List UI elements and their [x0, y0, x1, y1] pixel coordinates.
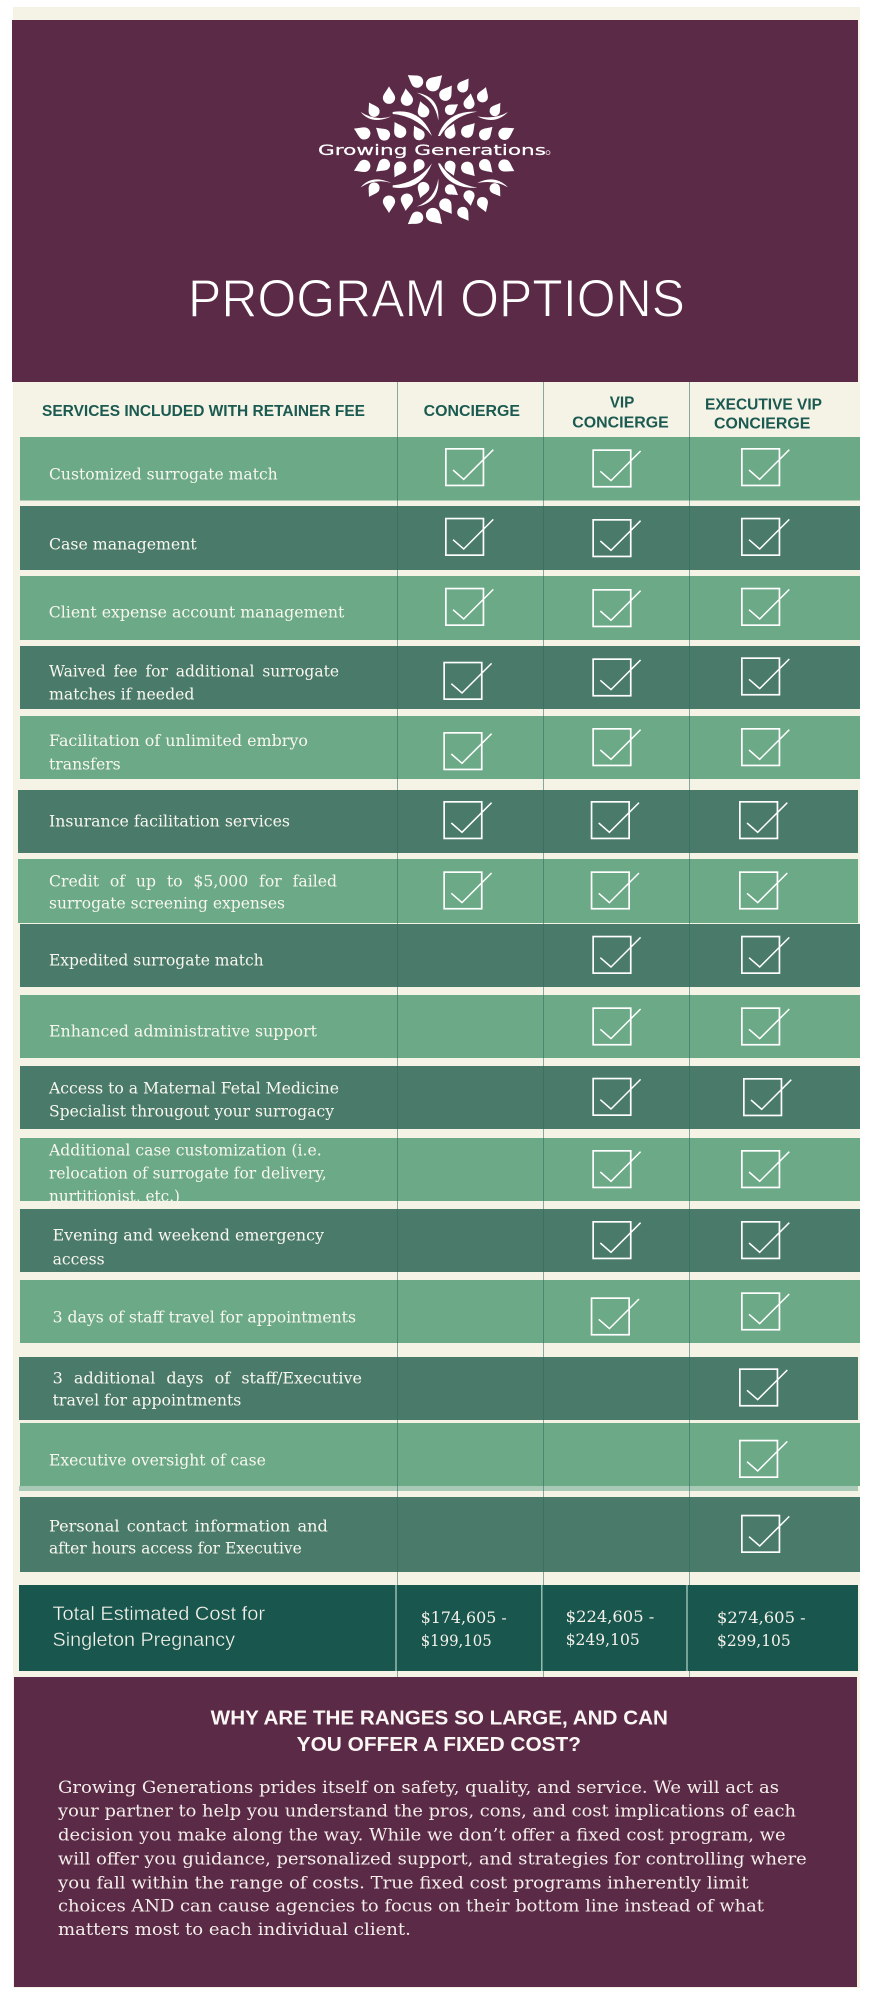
row: Additional case customization: Additional case customization (i.e. — [48, 1140, 322, 1159]
panel body text: Growing Generations prides itself on safety, quality, and service. We will act as — [58, 1778, 779, 1798]
row: Client expense account management: Client expense account management — [49, 602, 345, 621]
row: Additional case customization: relocation of surrogate for delivery, — [49, 1163, 327, 1182]
row: Personal contact information — [20, 1497, 860, 1572]
table column headers: EXECUTIVE VIP — [705, 396, 822, 413]
row: Expedited surrogate match — [20, 924, 860, 987]
panel heading — [211, 1707, 668, 1756]
row: Facilitation of unlimited embryo transfers: transfers — [49, 754, 121, 773]
row: 3 additional days of staff/Executive travel: 3 additional days of staff/Executive — [53, 1368, 362, 1387]
row: Evening and weekend emergency access — [20, 1209, 860, 1272]
table column headers — [42, 394, 822, 432]
panel body text: will offer you guidance, personalized support, and strategies for controlling where — [58, 1849, 807, 1869]
row: Executive oversight of case — [19, 1423, 860, 1491]
price: VIP Concierge: $224,605 - — [566, 1607, 654, 1626]
row: Facilitation of unlimited embryo transfers: Facilitation of unlimited embryo — [49, 731, 308, 750]
table column headers: CONCIERGE — [424, 403, 520, 420]
title: PROGRAM OPTIONS — [188, 270, 685, 328]
row: Case management: Case management — [49, 534, 197, 553]
price: Executive VIP Concierge: $299,105 — [717, 1631, 791, 1650]
total label: Singleton Pregnancy — [52, 1629, 235, 1651]
row: 3 days of staff travel: 3 days of staff travel for appointments — [53, 1307, 356, 1326]
row: Client expense account management — [20, 576, 860, 640]
row: Personal contact information: Personal contact information and — [49, 1516, 328, 1535]
panel heading: WHY ARE THE RANGES SO LARGE, AND CAN — [211, 1707, 668, 1730]
logo: Growing Generations — [318, 70, 550, 229]
row: 3 additional days of staff/Executive travel: travel for appointments — [53, 1390, 241, 1409]
row: Credit of up to $5,000: Credit of up to $5,000 for failed — [49, 871, 337, 890]
panel body text: you fall within the range of costs. True fixed cost programs inherently limit — [57, 1873, 749, 1893]
row: Customized surrogate match — [20, 437, 860, 500]
row: Additional case customization — [20, 1138, 860, 1205]
panel body text: decision you make along the way. While we don’t offer a fixed cost program, we — [58, 1826, 786, 1846]
row: Insurance facilitation services — [18, 790, 858, 853]
row: Credit of up to $5,000: surrogate screening expenses — [49, 893, 285, 912]
table column headers: CONCIERGE — [714, 415, 810, 432]
price: Concierge: $199,105 — [421, 1631, 492, 1650]
total label — [52, 1603, 266, 1651]
row: Access to a Maternal Fetal Medicine Specialist: Access to a Maternal Fetal Medicine — [48, 1078, 339, 1097]
price: Executive VIP Concierge — [717, 1608, 806, 1650]
row: Access to a Maternal Fetal Medicine Specialist — [20, 1066, 860, 1129]
panel: why are the ranges so large — [14, 1677, 857, 1987]
row: Facilitation of unlimited embryo transfers — [20, 716, 860, 779]
row: Credit of up to $5,000 — [18, 859, 858, 923]
logo: Growing Generations: Growing Generations — [318, 143, 546, 159]
panel body text: choices AND can cause agencies to focus on their bottom line instead of what — [58, 1897, 764, 1917]
row: 3 days of staff travel — [20, 1280, 860, 1343]
header panel — [12, 20, 858, 382]
table column headers: VIP — [610, 394, 634, 411]
total cost row — [19, 1585, 858, 1671]
price: Concierge: $174,605 - — [421, 1608, 507, 1627]
row: Waived fee: matches if needed — [49, 684, 194, 703]
row: Expedited surrogate match: Expedited surrogate match — [49, 950, 264, 969]
row: 3 additional days of staff/Executive travel — [19, 1357, 858, 1420]
row: Executive oversight of case: Executive oversight of case — [49, 1450, 266, 1469]
panel body text — [57, 1778, 807, 1940]
row: Insurance facilitation services: Insurance facilitation services — [49, 811, 290, 830]
row: Additional case customization: nurtitionist, etc.) — [49, 1186, 180, 1205]
row: Customized surrogate match: Customized surrogate match — [49, 464, 278, 483]
panel heading: YOU OFFER A FIXED COST? — [297, 1733, 581, 1756]
table column headers: CONCIERGE — [572, 414, 669, 431]
row: Access to a Maternal Fetal Medicine Specialist: Specialist througout your surrogacy — [49, 1101, 334, 1120]
total label: Total Estimated Cost for — [52, 1603, 266, 1625]
row: Evening and weekend emergency access: Evening and weekend emergency — [53, 1225, 324, 1244]
row: Personal contact information: after hours access for Executive — [49, 1538, 302, 1557]
price: Executive VIP Concierge: $274,605 - — [717, 1608, 806, 1627]
price: Concierge — [421, 1608, 507, 1650]
price: VIP Concierge — [566, 1607, 654, 1649]
panel body text: matters most to each individual client. — [58, 1920, 411, 1940]
row: Enhanced administrative support: Enhanced administrative support — [49, 1021, 318, 1040]
row: Waived fee: Waived fee for additional surrogate — [49, 661, 339, 680]
price: VIP Concierge: $249,105 — [566, 1630, 640, 1649]
row: Waived fee — [20, 646, 860, 709]
row: Evening and weekend emergency access: access — [53, 1249, 105, 1268]
row: Case management — [20, 506, 860, 570]
table column headers: SERVICES INCLUDED WITH RETAINER FEE — [42, 403, 365, 420]
panel body text: your partner to help you understand the pros, cons, and cost implications of each — [57, 1802, 796, 1822]
row: Enhanced administrative support — [20, 995, 860, 1058]
